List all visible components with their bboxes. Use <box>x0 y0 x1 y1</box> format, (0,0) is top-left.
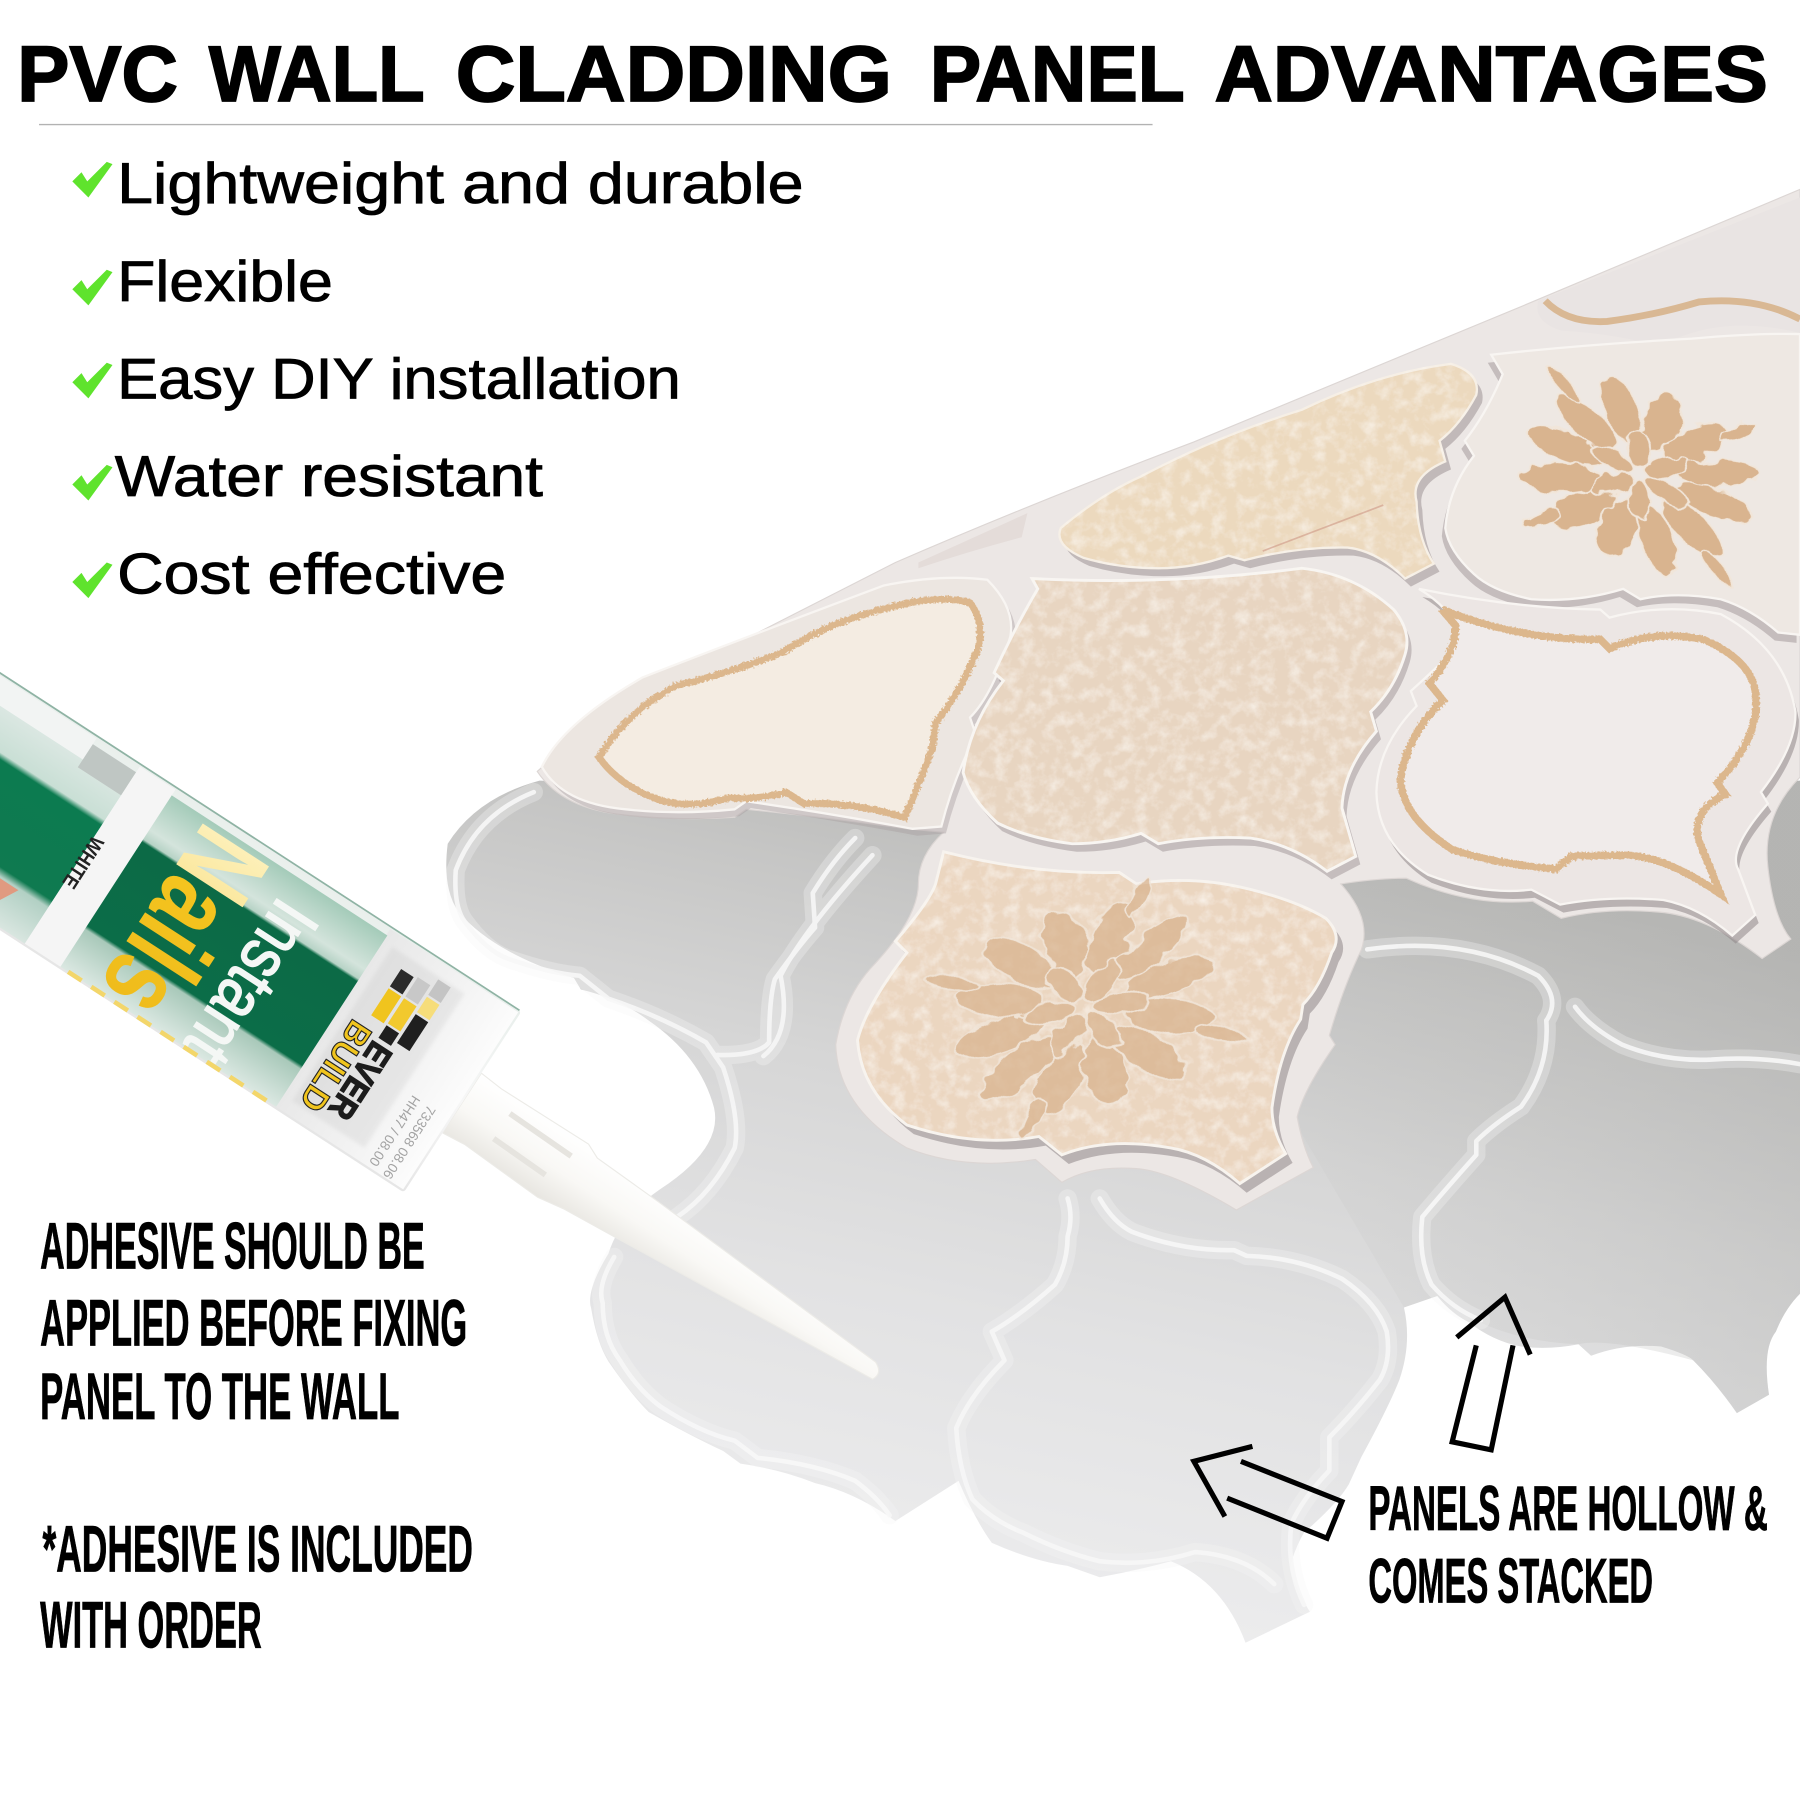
red wedge <box>0 806 18 925</box>
advantages checklist <box>72 152 804 606</box>
tube end section with logo <box>275 929 518 1189</box>
adhesive note: *ADHESIVE IS INCLUDED <box>42 1513 473 1586</box>
Instant wordmark: Instant <box>169 886 333 1078</box>
batch code <box>364 1093 438 1182</box>
title <box>17 29 1768 118</box>
hollow back of the panel <box>446 781 1800 1643</box>
nozzle <box>441 1073 898 1405</box>
title: PANEL <box>930 29 1185 118</box>
logo wordmark: EVER <box>321 1034 399 1126</box>
title: ADVANTAGES <box>1215 29 1768 118</box>
tile: cream upper <box>1059 364 1483 587</box>
item: lightweight and durable: Lightweight and durable <box>117 152 804 216</box>
batch code: HH47 / 08.00 <box>366 1093 423 1169</box>
adhesive note <box>40 1209 473 1661</box>
caulk tube <box>0 661 938 1463</box>
adhesive note: ADHESIVE SHOULD BE <box>40 1209 425 1282</box>
item: easy DIY installation: Easy DIY installation <box>117 347 681 411</box>
tile: top band <box>1537 197 1800 344</box>
floral motif <box>1488 346 1791 605</box>
decorated front panel <box>537 189 1800 1210</box>
tube body <box>0 661 521 1193</box>
arrow: pointing left <box>1194 1446 1342 1538</box>
adhesive note: WITH ORDER <box>40 1588 262 1661</box>
WHITE label: WHITE <box>57 832 108 893</box>
floral motif <box>912 859 1258 1157</box>
white band <box>25 767 175 967</box>
tube end section with logo: BUILD <box>292 1013 379 1118</box>
embossed tile ridges <box>455 792 1800 1605</box>
hollow panels note <box>1368 1474 1768 1617</box>
front sheet silhouette <box>537 189 1800 1210</box>
grey top window <box>78 744 136 795</box>
back green label <box>0 669 136 944</box>
tile: fragment at top edge <box>918 513 1027 568</box>
batch code: 733568 08.06 <box>380 1103 438 1182</box>
item: flexible: Flexible <box>117 250 333 314</box>
title: WALL <box>209 29 425 118</box>
adhesive note: APPLIED BEFORE FIXING <box>40 1286 467 1359</box>
title: PVC <box>17 29 178 118</box>
Nails wordmark: Nails <box>77 805 292 1041</box>
item: cost effective: Cost effective <box>117 542 506 606</box>
item: water resistant: Water resistant <box>115 445 543 509</box>
adhesive note: PANEL TO THE WALL <box>40 1360 399 1433</box>
tile: cream center <box>963 568 1412 879</box>
bricks <box>363 959 451 1056</box>
arrow: pointing up <box>1452 1297 1530 1450</box>
tile: white with gold outline <box>1376 589 1799 944</box>
title: CLADDING <box>456 29 892 118</box>
tile: floral bottom <box>858 852 1343 1193</box>
tile: floral upper right <box>1442 334 1800 643</box>
tile: gold outline left <box>542 578 1016 836</box>
main green label <box>59 794 387 1107</box>
